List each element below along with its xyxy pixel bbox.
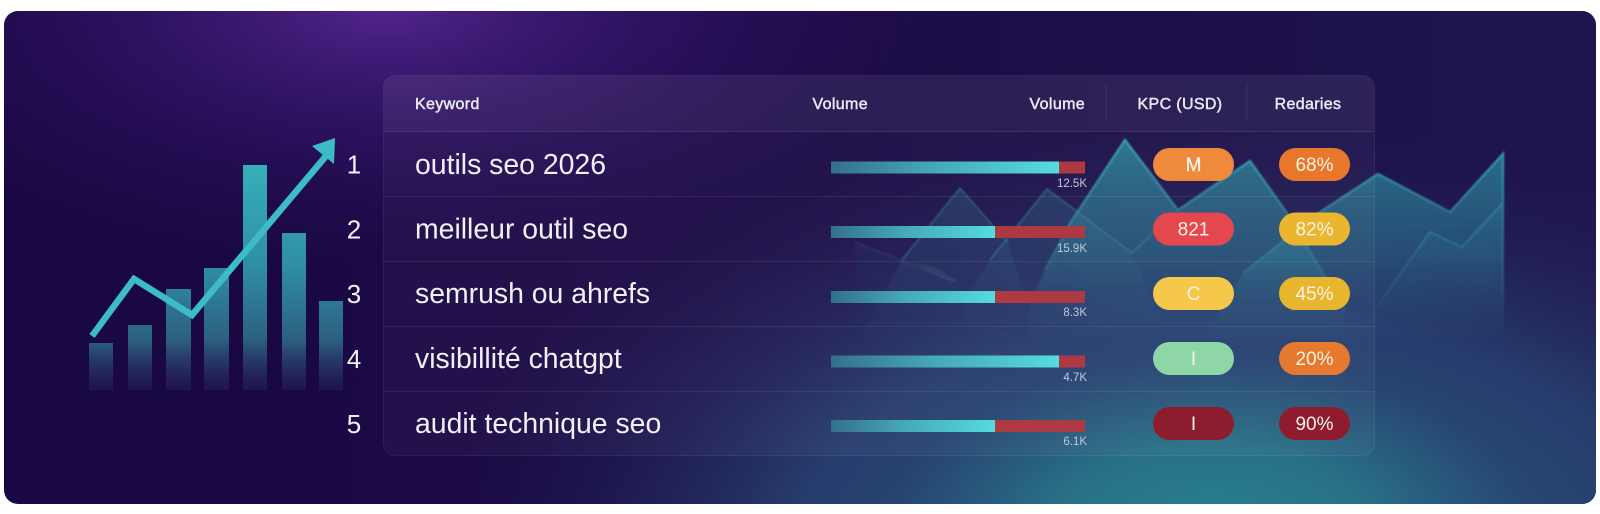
- row 1: M: [1186, 155, 1201, 176]
- row 3: semrush ou ahrefs: [415, 278, 650, 310]
- row 4: 4.7K: [1063, 372, 1087, 384]
- row 5: 6.1K: [1063, 436, 1087, 448]
- row 3: 45%: [1295, 284, 1334, 305]
- row 3: C: [1187, 284, 1200, 305]
- table header: Keyword: [415, 96, 480, 113]
- row 2: 821: [1178, 220, 1209, 240]
- table header: Volume: [1030, 96, 1085, 113]
- table header: KPC (USD): [1138, 96, 1222, 113]
- row 4: I: [1191, 349, 1196, 370]
- table header: Redaries: [1275, 96, 1341, 113]
- background area chart: [855, 140, 1503, 345]
- row 2: 82%: [1295, 220, 1334, 240]
- row 1: [415, 148, 1350, 190]
- row 4: visibillité chatgpt: [415, 343, 622, 375]
- row 1: outils seo 2026: [415, 149, 606, 181]
- rank numbers: 5: [347, 409, 361, 439]
- row 5: [415, 407, 1350, 448]
- table header: Volume: [812, 96, 868, 113]
- rank numbers: 3: [347, 279, 361, 309]
- row 2: meilleur outil seo: [415, 214, 628, 246]
- rank numbers: [347, 150, 361, 439]
- row 5: 90%: [1295, 414, 1334, 435]
- rank numbers: 2: [347, 214, 361, 244]
- row 5: I: [1191, 414, 1196, 435]
- row 4: [415, 342, 1350, 384]
- icon: trend arrow: [92, 138, 335, 336]
- rank numbers: 1: [347, 150, 361, 180]
- row 4: 20%: [1295, 349, 1334, 370]
- row 3: 8.3K: [1063, 307, 1087, 319]
- row 3: [415, 277, 1350, 319]
- rank numbers: 4: [347, 344, 361, 374]
- bar chart with rising arrow: [89, 138, 343, 390]
- keyword table panel: [384, 76, 1374, 456]
- row 5: audit technique seo: [415, 408, 661, 440]
- row 2: [415, 212, 1350, 255]
- row 1: 68%: [1295, 155, 1334, 176]
- table header: [384, 76, 1374, 132]
- row 2: 15.9K: [1057, 243, 1087, 255]
- row 1: 12.5K: [1057, 178, 1087, 190]
